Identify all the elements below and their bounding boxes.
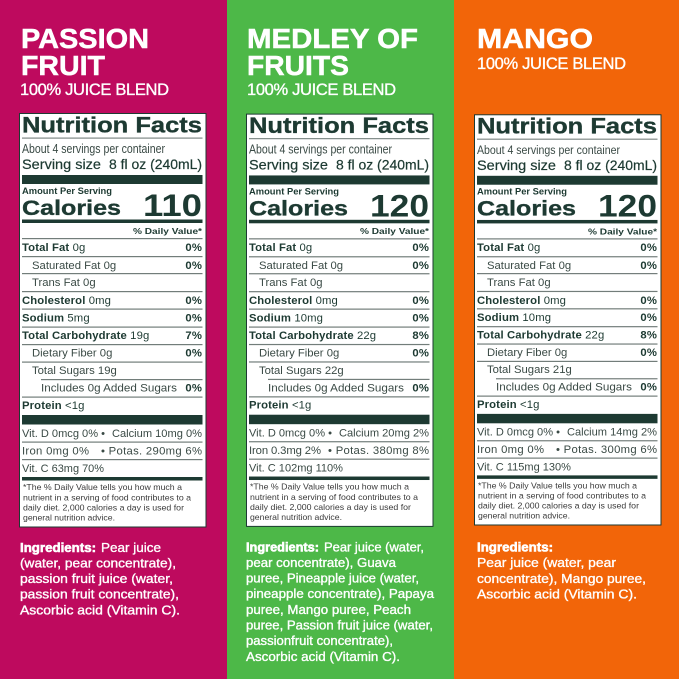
nutrition label: passion fruit: 8 fl oz (240mL) [109,157,202,172]
nutrition label: passion fruit: 0% [185,348,202,360]
nutrition label: passion fruit: general nutrition advice. [23,514,115,522]
nutrition label: medley of fruits: 0% [412,347,429,359]
nutrition label: passion fruit: Protein <1g [22,400,85,412]
panel: medley of fruits background [227,0,454,679]
nutrition label: passion fruit: 0% [185,260,202,272]
nutrition label: mango: Cholesterol 0mg [477,295,566,307]
nutrition label: medley of fruits: Saturated Fat 0g [259,260,343,272]
ingredients: mango: concentrate), Mango puree, [477,571,646,586]
nutrition label: passion fruit: Vit. D 0mcg 0% • [22,428,105,440]
nutrition label: mango: Calcium 14mg 2% [567,427,657,439]
nutrition label: passion fruit: Iron 0mg 0% [22,446,89,458]
nutrition label: mango: Total Fat 0g [477,242,540,254]
nutrition label: mango: Includes 0g Added Sugars [496,382,632,394]
nutrition label: mango: 120 [598,189,657,223]
nutrition label: mango: Saturated Fat 0g [487,260,571,272]
nutrition label: mango: Vit. C 115mg 130% [477,461,571,473]
nutrition label: mango: Vit. D 0mcg 0% • [477,427,560,439]
nutrition label: mango: 8% [640,330,657,341]
nutrition label: passion fruit: 0% [185,312,202,324]
ingredients: medley of fruits: passionfruit concentrate), [246,633,393,648]
nutrition label: passion fruit: daily diet. 2,000 calories a day is used for [23,504,184,512]
nutrition label: medley of fruits: About 4 servings per container [249,143,392,156]
nutrition label: mango: About 4 servings per container [477,143,620,157]
nutrition label: medley of fruits: 0% [412,382,429,394]
nutrition label: medley of fruits: daily diet. 2,000 calories a day is used for [250,503,411,512]
nutrition label: mango: 0% [640,260,657,272]
heading: mango: 100% JUICE BLEND [477,55,626,73]
ingredients: medley of fruits: Ascorbic acid (Vitamin C). [246,649,400,664]
nutrition label: mango: Protein <1g [477,399,540,411]
nutrition label: medley of fruits [246,113,433,526]
nutrition label: mango: Nutrition Facts [477,114,657,139]
nutrition label: passion fruit: Vit. C 63mg 70% [22,463,104,475]
ingredients: medley of fruits: puree, Passion fruit juice (water, [246,618,433,632]
heading: medley of fruits [247,23,418,99]
ingredients: mango [477,540,646,602]
ingredients: medley of fruits: Pear juice (water, [324,540,424,554]
nutrition label: medley of fruits: 8% [412,330,429,342]
nutrition label: medley of fruits: Dietary Fiber 0g [259,347,339,359]
nutrition label: passion fruit: 0% [185,295,202,307]
ingredients: passion fruit: Pear juice [101,540,161,555]
nutrition label: passion fruit: About 4 servings per container [22,142,165,156]
nutrition label: passion fruit: Total Fat 0g [22,242,85,254]
nutrition label: passion fruit: 110 [143,187,202,223]
nutrition label: mango: % Daily Value* [588,226,658,236]
nutrition label: mango: Sodium 10mg [477,312,551,324]
nutrition label: mango [474,114,661,525]
ingredients: mango: Pear juice (water, pear [477,555,617,570]
nutrition label: medley of fruits: *The % Daily Value tells you how much a [250,483,409,491]
nutrition label: mango: nutrient in a serving of food contributes to a [478,492,646,501]
nutrition label: medley of fruits: • Potas. 380mg 8% [328,445,429,457]
nutrition label: medley of fruits: Vit. D 0mcg 0% • [249,428,332,440]
heading: passion fruit: 100% JUICE BLEND [20,81,169,99]
heading: medley of fruits: FRUITS [247,50,349,81]
nutrition label: passion fruit: Total Carbohydrate 19g [22,330,149,342]
nutrition label: passion fruit: 0% [185,242,202,254]
nutrition label: passion fruit: 7% [185,330,202,342]
nutrition label: medley of fruits: Vit. C 102mg 110% [249,463,343,475]
nutrition label: passion fruit: Calories [22,196,121,220]
nutrition label: medley of fruits: 120 [370,188,429,223]
nutrition label: mango: *The % Daily Value tells you how much a [478,481,637,490]
nutrition label: mango: Total Carbohydrate 22g [477,330,604,341]
nutrition label: mango: 0% [640,347,657,359]
heading: passion fruit: FRUIT [21,50,105,81]
nutrition label: mango: Iron 0mg 0% [477,444,544,456]
nutrition label: medley of fruits: Iron 0.3mg 2% [249,445,321,457]
ingredients: passion fruit: passion fruit juice (water, [20,571,173,586]
nutrition label: mango: Amount Per Serving [477,187,567,197]
nutrition label: medley of fruits: Protein <1g [249,400,311,412]
nutrition label: passion fruit: 0% [185,382,202,394]
nutrition label: mango: Calories [477,197,576,220]
nutrition label: mango: 0% [640,242,657,254]
nutrition label: passion fruit: Cholesterol 0mg [22,295,111,307]
ingredients: medley of fruits: pear concentrate), Guava [246,555,397,570]
heading: passion fruit: PASSION [21,23,149,54]
nutrition label: medley of fruits: nutrient in a serving of food contributes to a [250,493,418,502]
nutrition label: medley of fruits: Calories [249,196,348,220]
nutrition label: medley of fruits: 0% [412,313,429,324]
nutrition label: medley of fruits: 0% [412,260,429,272]
ingredients: medley of fruits: puree, Mango puree, Peach [246,602,411,617]
heading: mango [477,23,626,73]
ingredients: medley of fruits: pineapple concentrate), Papaya [246,586,435,601]
nutrition label: passion fruit: Trans Fat 0g [32,277,96,289]
ingredients: medley of fruits [246,540,435,664]
nutrition label: medley of fruits: Total Sugars 22g [259,365,344,377]
nutrition label: medley of fruits: Trans Fat 0g [259,277,323,289]
nutrition label: passion fruit: • Potas. 290mg 6% [101,446,202,458]
nutrition label: mango: • Potas. 300mg 6% [556,444,657,456]
nutrition label: passion fruit: Dietary Fiber 0g [32,348,112,360]
heading: passion fruit [20,23,169,99]
nutrition label: mango: daily diet. 2,000 calories a day is used for [478,502,639,511]
nutrition label: medley of fruits: 0% [412,242,429,254]
nutrition label: medley of fruits: general nutrition advice. [250,513,342,522]
nutrition label: passion fruit: nutrient in a serving of food contributes to a [23,494,191,502]
heading: medley of fruits: MEDLEY OF [247,23,418,54]
ingredients: passion fruit: Ingredients: [20,540,96,555]
nutrition label: medley of fruits: Calcium 20mg 2% [339,428,429,440]
nutrition label: passion fruit: Calcium 10mg 0% [112,428,202,440]
nutrition label: passion fruit: Sodium 5mg [22,312,90,324]
nutrition label: medley of fruits: 8 fl oz (240mL) [336,157,429,172]
ingredients: mango: Ingredients: [477,540,553,554]
nutrition label: medley of fruits: 0% [412,295,429,307]
nutrition label: mango: 0% [640,382,657,394]
nutrition label: medley of fruits: Amount Per Serving [249,186,339,196]
nutrition label: mango: 0% [640,295,657,307]
nutrition label: medley of fruits: Total Fat 0g [249,242,312,254]
ingredients: mango: Ascorbic acid (Vitamin C). [477,586,637,602]
heading: medley of fruits: 100% JUICE BLEND [247,81,396,99]
nutrition label: mango: Trans Fat 0g [487,277,551,289]
nutrition label: medley of fruits: Total Carbohydrate 22g [249,330,376,342]
nutrition label: medley of fruits: Cholesterol 0mg [249,295,338,307]
ingredients: medley of fruits: puree, Pineapple juice (water, [246,570,419,586]
nutrition label: mango: 0% [640,312,657,324]
nutrition label: passion fruit: *The % Daily Value tells you how much a [23,483,182,492]
nutrition label: mango: 8 fl oz (240mL) [564,158,657,173]
nutrition label: passion fruit: Serving size [22,157,101,172]
nutrition label: passion fruit: % Daily Value* [133,226,203,236]
nutrition label: medley of fruits: Includes 0g Added Sugars [268,382,404,394]
nutrition label: passion fruit: Includes 0g Added Sugars [41,382,177,394]
nutrition label: mango: Serving size [477,158,556,173]
nutrition label: passion fruit: Total Sugars 19g [32,365,117,377]
nutrition label: mango: general nutrition advice. [478,512,570,521]
ingredients: passion fruit [20,540,180,618]
nutrition label: passion fruit [20,112,206,527]
nutrition label: medley of fruits: Serving size [249,157,328,172]
nutrition label: medley of fruits: Sodium 10mg [249,313,323,324]
ingredients: passion fruit: Ascorbic acid (Vitamin C). [20,602,180,618]
nutrition label: passion fruit: Amount Per Serving [22,186,112,196]
nutrition label: passion fruit: Nutrition Facts [22,112,202,138]
nutrition label: mango: Total Sugars 21g [487,364,572,376]
nutrition label: passion fruit: Saturated Fat 0g [32,260,116,272]
ingredients: passion fruit: (water, pear concentrate), [20,556,176,570]
nutrition label: medley of fruits: % Daily Value* [360,226,430,236]
panel: mango background [454,0,679,679]
nutrition label: mango: Dietary Fiber 0g [487,347,567,359]
nutrition label: medley of fruits: Nutrition Facts [249,113,429,138]
heading: mango: MANGO [477,23,593,54]
ingredients: medley of fruits: Ingredients: [246,540,319,554]
panel: passion fruit background [0,0,227,679]
ingredients: passion fruit: passion fruit concentrate), [20,586,179,602]
